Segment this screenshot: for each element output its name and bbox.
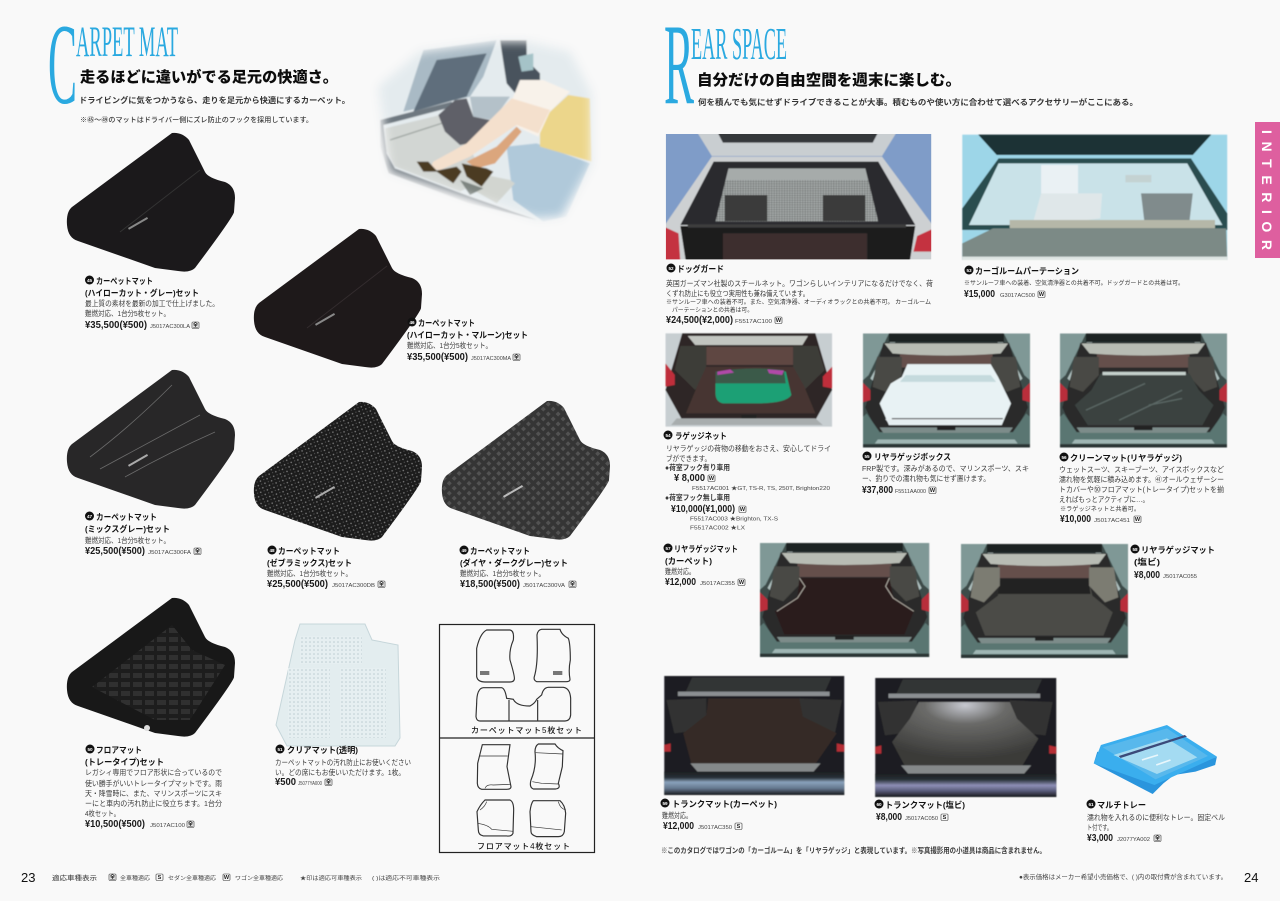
mat image xyxy=(67,133,235,272)
price note: ●表示価格はメーカー希望小売価格で、( )内の取付費が含まれています。 xyxy=(1019,872,1227,881)
number badge: 52 xyxy=(668,266,674,271)
title: CARPET MAT xyxy=(48,1,178,129)
product text: J5017AC300LA xyxy=(150,324,190,330)
number badge xyxy=(660,798,670,808)
product text: W xyxy=(709,476,715,482)
number badge: 60 xyxy=(876,802,882,807)
product text: 全 xyxy=(326,778,332,786)
number badge: 59 xyxy=(662,801,668,806)
product text: J5017AC355 xyxy=(700,581,735,587)
number badge xyxy=(460,546,468,554)
legend: fitment symbols: ( )は適応不可車種表示 xyxy=(372,874,441,882)
product text: F5517AC001 ★GT, TS-R, TS, 250T, Brighton220 xyxy=(692,486,830,492)
mat image xyxy=(442,401,610,540)
product text: J5017AC300MA xyxy=(471,356,511,362)
product text: F5511AA000 xyxy=(895,489,926,495)
product text xyxy=(1087,800,1225,844)
product text: リヤラゲッジマット xyxy=(1141,545,1215,555)
title: CARPET MAT: C xyxy=(48,1,77,129)
product text: (カーペット) xyxy=(665,556,712,566)
product: rear luggage box 55 xyxy=(862,334,1030,496)
number badge xyxy=(408,318,416,326)
heading: 自分だけの自由空間を週末に楽しむ。 xyxy=(697,71,961,89)
product text xyxy=(1059,453,1224,525)
number badge xyxy=(862,452,872,460)
product text: 難燃対応。 xyxy=(665,567,695,576)
product text: 全 xyxy=(188,820,194,828)
product text: 難燃対応、1台分5枚セット。 xyxy=(460,569,545,578)
product text: クリーンマット(リヤラゲッジ) xyxy=(1070,453,1182,463)
product text: F5517AC002 ★LX xyxy=(690,526,745,532)
number badge: 50 xyxy=(87,747,93,752)
product text xyxy=(85,745,223,830)
product: cargo room partition 53 xyxy=(962,135,1227,300)
hook note: ※㊺〜㊾のマットはドライバー側にズレ防止のフックを採用しています。 xyxy=(80,115,313,124)
product text xyxy=(964,266,1184,300)
product: dog guard 52 xyxy=(664,132,934,326)
product: mat 49 xyxy=(442,401,610,590)
legend: fitment symbols: 全 xyxy=(110,873,116,881)
number badge: 48 xyxy=(269,548,275,553)
product: mat 47 xyxy=(67,370,235,557)
product text: J5017AC300VA xyxy=(523,583,565,589)
product text: トランクマット(カーペット) xyxy=(672,799,777,809)
panel: carpet mat heading: ARPET MAT xyxy=(76,19,178,66)
product text: リヤラゲッジの荷物の移動をおさえ、安心してドライ xyxy=(666,444,831,453)
product text: 難燃対応、1台分5枚セット。 xyxy=(407,341,492,350)
product: floor mat 50 xyxy=(67,598,235,830)
number badge xyxy=(964,266,974,274)
diagram frame xyxy=(440,624,594,852)
product text: ¥8,000 xyxy=(1134,569,1160,581)
product text: (ゼブラミックス)セット xyxy=(267,558,352,568)
product text: W xyxy=(776,318,782,324)
product text: W xyxy=(740,507,746,513)
product text xyxy=(85,276,219,331)
photo: clean mat xyxy=(1060,334,1227,447)
product text: ●荷室フック無し車用 xyxy=(665,493,730,502)
product text: ※ラゲッジネットと共着可。 xyxy=(1060,505,1140,513)
title: REAR SPACE: R xyxy=(664,1,694,129)
product text: J5017AC300FA xyxy=(148,550,191,556)
product text: 全 xyxy=(195,547,201,555)
photo: blue tray xyxy=(1094,725,1217,794)
product: rear luggage mat carpet 57 xyxy=(664,543,929,657)
product text: ¥35,500(¥500) xyxy=(85,319,147,331)
number badge: 51 xyxy=(277,747,283,752)
product text: えればもっとアクティブに…。 xyxy=(1059,495,1149,504)
number badge xyxy=(85,276,94,284)
product text: リヤラゲッジマット xyxy=(674,544,738,554)
product text: ¥25,500(¥500) xyxy=(267,578,328,590)
product text: ー、釣りでの濡れ物も気にせず置けます。 xyxy=(862,474,990,483)
product text: W xyxy=(930,488,936,494)
section tab: INTERIOR: INTERIOR xyxy=(1259,130,1275,250)
product text: 難燃対応、1台分5枚セット。 xyxy=(85,536,170,545)
product text: ¥500 xyxy=(275,776,296,788)
number badge xyxy=(276,744,284,754)
product text: F5517AC100 xyxy=(735,319,772,325)
product text: ト付です。 xyxy=(1087,823,1112,832)
number badge xyxy=(86,744,94,754)
product text: カーペットマット xyxy=(96,276,153,286)
product text: J5017AC100 xyxy=(150,823,185,829)
product text: (ダイヤ・ダークグレー)セット xyxy=(460,558,568,568)
product text: 全 xyxy=(1155,834,1161,842)
product text: クリアマット(透明) xyxy=(287,745,358,755)
legend: fitment symbols: S xyxy=(158,875,162,881)
product: mat 46 xyxy=(254,229,528,368)
product text: 全 xyxy=(379,580,385,588)
number badge: 47 xyxy=(87,514,92,519)
product text: (トレータイプ)セット xyxy=(85,757,164,767)
4 piece floor mat set drawing xyxy=(477,744,566,837)
label: 5 piece set: カーペットマット5枚セット xyxy=(471,725,582,735)
product: mat 48 xyxy=(254,402,422,590)
product text: 全 xyxy=(570,580,576,588)
product text: J5017AC451 xyxy=(1094,518,1130,524)
product text: ¥12,000 xyxy=(665,576,696,588)
legend: fitment symbols: 適応車種表示 xyxy=(52,873,98,882)
illustration: legs on pedals in car footwell xyxy=(378,39,593,222)
product text: ¥24,500(¥2,000) xyxy=(666,314,733,326)
panel: carpet mat heading xyxy=(48,1,350,129)
title: REAR SPACE xyxy=(664,1,787,129)
product text xyxy=(862,452,1029,496)
product text: 難燃対応、1台分5枚セット。 xyxy=(85,309,170,318)
product text: フロアマット xyxy=(96,745,142,755)
product text: W xyxy=(1039,292,1045,298)
product text xyxy=(267,546,385,590)
product text: W xyxy=(1135,517,1141,523)
number badge: 55 xyxy=(864,454,870,459)
legend: fitment symbols: ★印は適応可車種表示 xyxy=(300,874,363,882)
product text: カーペットマットの汚れ防止にお使いください xyxy=(275,758,411,767)
product text xyxy=(1134,545,1215,581)
number badge: 57 xyxy=(665,546,671,551)
number badge xyxy=(85,512,94,520)
legend: fitment symbols xyxy=(52,873,441,882)
product text: トカバーや㊿フロアマット(トレータイプ)セットを揃 xyxy=(1059,485,1224,494)
product text: J5017AC350 xyxy=(698,825,732,831)
product text: S xyxy=(737,824,741,830)
number badge: 58 xyxy=(1132,547,1138,552)
product text: J5077YA000 xyxy=(298,781,322,787)
number badge xyxy=(1130,544,1140,554)
product text: ブができます。 xyxy=(666,454,711,463)
product text: ¥10,000 xyxy=(1060,513,1091,525)
subheading: ドライビングに気をつかうなら、走りを足元から快適にするカーペット。 xyxy=(79,95,350,105)
product text: 難燃対応、1台分5枚セット。 xyxy=(267,569,352,578)
number badge: 54 xyxy=(665,433,671,438)
legend: fitment symbols: セダン全車種適応 xyxy=(168,874,217,882)
number badge xyxy=(1060,452,1068,462)
product text: S xyxy=(943,815,947,821)
number badge: 45 xyxy=(87,278,92,283)
mat image xyxy=(254,402,422,541)
product text: ¥37,800 xyxy=(862,484,893,496)
product text: 濡れ物を気軽に積み込めます。㊶オールウェザーシー xyxy=(1059,475,1224,484)
product text: トランクマット(塩ビ) xyxy=(885,800,965,810)
product text: FRP製です。深みがあるので、マリンスポーツ、スキ xyxy=(862,464,1029,473)
product: trunk mat vinyl 60 xyxy=(874,678,1056,823)
page number 23: 23 xyxy=(21,870,35,885)
product text: 全 xyxy=(193,321,199,329)
product text: J5017AC050 xyxy=(905,816,938,822)
label: 4 piece set: フロアマット4枚セット xyxy=(477,841,570,851)
product text: くずれ防止にも役立つ実用性も兼ね備えています。 xyxy=(666,289,809,298)
mat image xyxy=(67,370,235,509)
photo: luggage mat carpet xyxy=(760,543,929,657)
footer left xyxy=(21,870,441,885)
product text: J2077YA002 xyxy=(1117,837,1150,843)
product text: ¥18,500(¥500) xyxy=(460,578,520,590)
product text: 難燃対応。 xyxy=(662,811,692,820)
product text: レガシィ専用でフロア形状に合っているので xyxy=(85,768,222,777)
photo: dog guard xyxy=(664,132,934,262)
product text: ●荷室フック有り車用 xyxy=(665,463,730,472)
product text: 濡れ物を入れるのに便利なトレー。固定ベル xyxy=(1087,813,1225,822)
number badge xyxy=(268,546,276,554)
number badge: 53 xyxy=(966,268,972,273)
photo: luggage box xyxy=(863,334,1030,447)
product text xyxy=(407,318,528,363)
page number 24: 24 xyxy=(1244,870,1258,885)
product text: F5517AC003 ★Brighton, TX-S xyxy=(690,516,778,522)
heading: 走るほどに違いがでる足元の快適さ。 xyxy=(80,68,338,86)
section tab: INTERIOR xyxy=(1255,122,1280,258)
product text: ※サンルーフ車への装着不可。また、空気清浄器、オーディオラックとの共着不可。 カーゴルーム xyxy=(666,298,931,306)
product text: ¥12,000 xyxy=(663,820,694,832)
product text: ※サンルーフ車への装着、空気清浄器との共着不可。ドッグガードとの共着は可。 xyxy=(964,279,1184,287)
product text: 使い勝手がいいトレータイプマットです。雨 xyxy=(85,779,222,788)
product text: (ハイローカット・マルーン)セット xyxy=(407,330,528,340)
product text xyxy=(665,431,831,532)
product: multi tray 61 xyxy=(1086,725,1225,844)
mat image xyxy=(67,598,235,737)
product text: ーにと車内の汚れ防止に役立ちます。1台分 xyxy=(85,799,223,808)
product text: カーペットマット xyxy=(418,318,475,328)
product text: ¥8,000 xyxy=(876,811,902,823)
legend: fitment symbols: ワゴン全車種適応 xyxy=(235,874,284,882)
product text: ドッグガード xyxy=(677,264,724,274)
mat image xyxy=(276,624,400,746)
product: luggage net 54 xyxy=(664,333,832,532)
product text: J5017AC300DB xyxy=(332,583,375,589)
product: rear luggage mat vinyl 58 xyxy=(961,544,1215,658)
photo: trunk mat vinyl xyxy=(875,678,1056,797)
product text xyxy=(876,800,965,823)
panel: rear space heading xyxy=(664,1,1138,129)
product text: W xyxy=(739,580,745,586)
legend: fitment symbols: 全車種適応 xyxy=(120,874,151,882)
product text: G3017AC500 xyxy=(1000,293,1035,299)
product: clean mat 56 xyxy=(1059,334,1227,525)
photo: luggage mat vinyl xyxy=(961,544,1128,658)
product text: ¥25,500(¥500) xyxy=(85,545,145,557)
product text xyxy=(665,544,745,588)
panel: rear space heading: EAR SPACE xyxy=(691,18,787,69)
product text: (塩ビ) xyxy=(1134,557,1160,567)
number badge: 56 xyxy=(1061,455,1067,460)
product text: ウェットスーツ、スキーブーツ、アイスボックスなど xyxy=(1059,465,1224,474)
product text: カーゴルームパーテーション xyxy=(975,266,1079,276)
product: trunk mat carpet 59 xyxy=(660,676,844,832)
product text xyxy=(666,264,933,326)
subheading: 何を積んでも気にせずドライブできることが大事。積むものや使い方に合わせて選べるアクセサリーがここにある。 xyxy=(698,97,1138,107)
product: clear mat 51 xyxy=(275,624,411,788)
number badge: 49 xyxy=(461,548,467,553)
product text: ¥15,000 xyxy=(964,288,995,300)
product text: ¥10,500(¥500) xyxy=(85,818,145,830)
product text: 全 xyxy=(514,353,520,361)
number badge xyxy=(664,544,672,552)
product text xyxy=(662,799,777,832)
product text: ラゲッジネット xyxy=(675,431,727,441)
number badge xyxy=(666,264,676,272)
product text: マルチトレー xyxy=(1097,800,1146,810)
number badge xyxy=(874,800,884,808)
product text: 4枚セット。 xyxy=(85,809,120,818)
mat image xyxy=(254,229,422,368)
number badge xyxy=(664,430,672,440)
photo: luggage net xyxy=(666,333,832,427)
product text: カーペットマット xyxy=(96,512,157,522)
number badge: 46 xyxy=(409,320,415,325)
product text: ¥3,000 xyxy=(1087,832,1113,844)
product text: ¥ 8,000 xyxy=(674,472,705,484)
catalog note: ※このカタログではワゴンの「カーゴルーム」を「リヤラゲッジ」と表現しています。※写真撮影用の小道具は商品に含まれません。 xyxy=(661,846,1046,855)
product text: (ミックスグレー)セット xyxy=(85,524,170,534)
product text xyxy=(85,512,201,557)
diagram: mat set outlines xyxy=(440,624,594,852)
5 piece carpet set drawing xyxy=(476,629,571,721)
footer right xyxy=(1019,870,1258,885)
product text: J5017AC055 xyxy=(1163,574,1197,580)
product text: カーペットマット xyxy=(278,546,340,556)
product text: パーテーションとの共着は可。 xyxy=(672,306,753,314)
product text: カーペットマット xyxy=(470,546,530,556)
number badge: 61 xyxy=(1088,802,1094,807)
legend: fitment symbols: W xyxy=(224,875,230,881)
product text: 英国ガーズマン社製のスチールネット。ワゴンらしいインテリアになるだけでなく、荷 xyxy=(666,279,933,288)
photo: cargo partition xyxy=(962,135,1227,260)
product text xyxy=(275,745,411,788)
product text: (ハイローカット・グレー)セット xyxy=(85,288,199,298)
product text: リヤラゲッジボックス xyxy=(874,452,951,462)
product text: ¥35,500(¥500) xyxy=(407,351,468,363)
product text: 最上質の素材を最新の加工で仕上げました。 xyxy=(85,299,219,308)
product text: 天・降雪時に、また、マリンスポーツにスキ xyxy=(85,789,222,798)
product text xyxy=(460,546,576,590)
product: mat 45 xyxy=(67,133,235,331)
product text: い。どの席にもお使いいただけます。1枚。 xyxy=(275,768,405,777)
photo: trunk mat carpet xyxy=(664,676,844,795)
product text: ¥10,000(¥1,000) xyxy=(671,503,735,515)
